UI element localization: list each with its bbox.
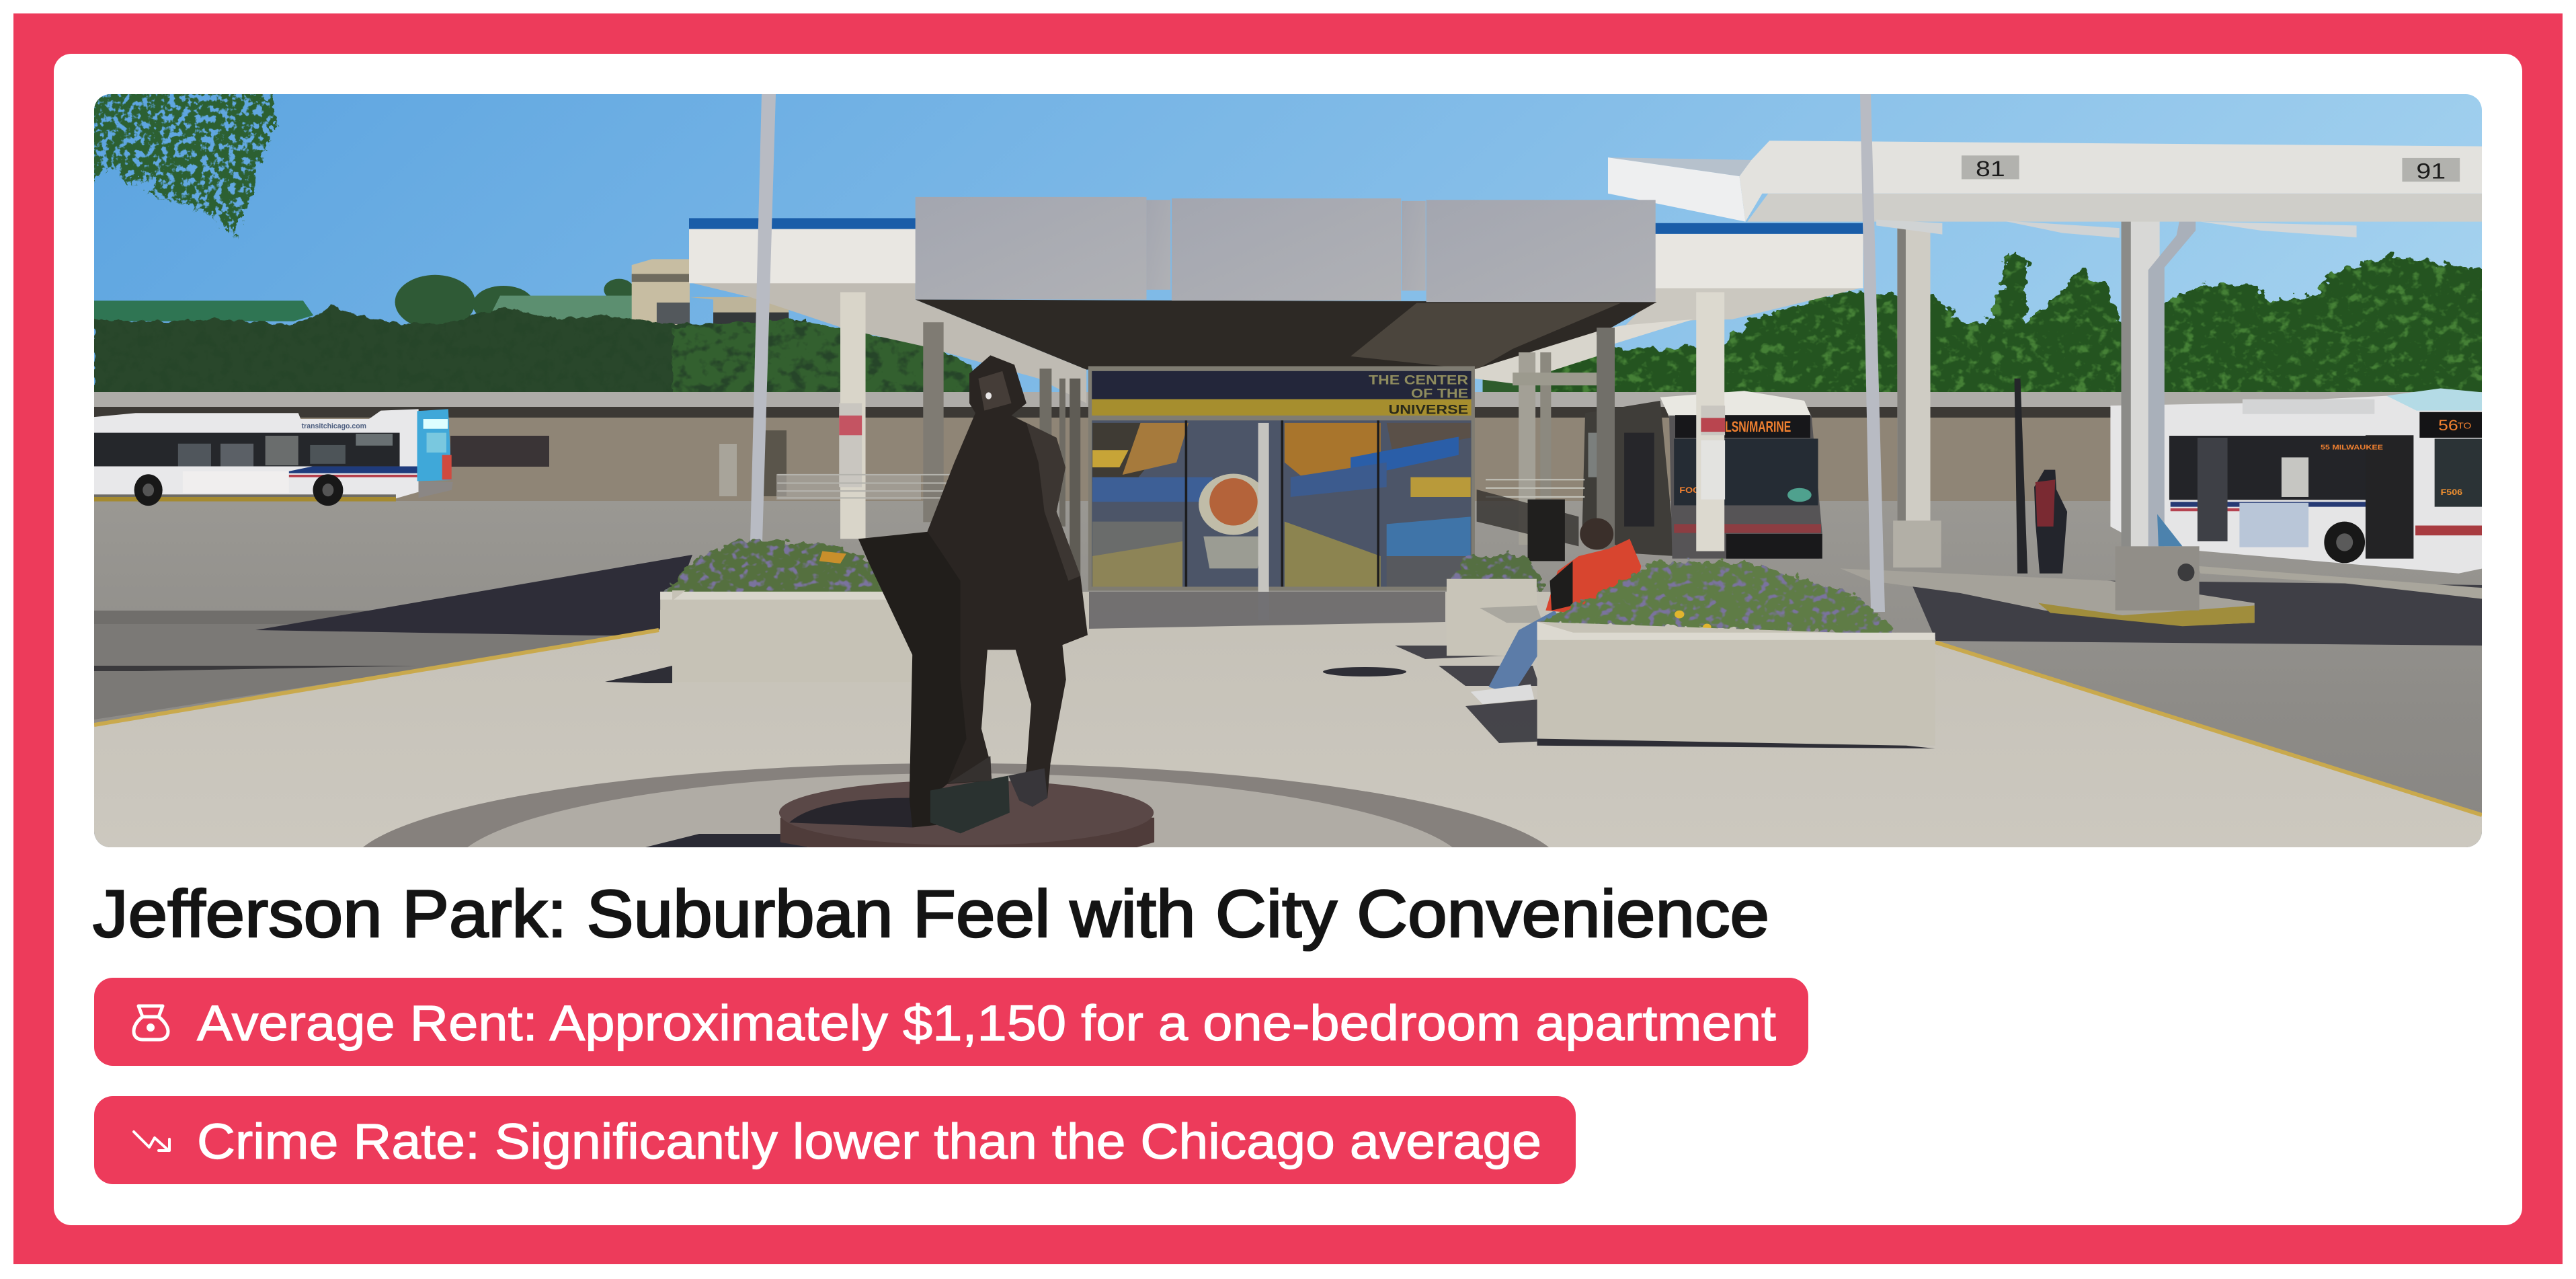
station canopy <box>689 197 1657 620</box>
bay canopy: 91 <box>2416 159 2446 184</box>
mural: The Center of the Universe: UNIVERSE <box>1388 403 1468 417</box>
sidewalk <box>94 592 2482 847</box>
right small planter <box>1447 553 1543 656</box>
rent text: Average Rent: Approximately $1,150 for a one-bedroom apartment <box>197 995 1776 1051</box>
photo: Jefferson Park transit center <box>93 94 2482 1184</box>
center bus and right fascia: FOO <box>1679 486 1700 495</box>
bay canopy <box>1608 141 2519 238</box>
statue of Jefferson on pedestal <box>779 355 1154 850</box>
right bus: TO <box>2458 421 2472 430</box>
pedestal <box>779 780 1154 850</box>
left planter left corner <box>660 590 686 681</box>
left bus: transitchicago.com <box>302 422 366 430</box>
big column with pipe <box>2116 206 2200 611</box>
mural: The Center of the Universe <box>1088 366 1475 590</box>
right road shadow <box>1909 578 2482 646</box>
right bus: 56 <box>2438 418 2458 434</box>
white lower soffit <box>1534 319 1693 369</box>
center bus and right fascia <box>1534 223 1864 559</box>
pavement <box>94 501 2482 847</box>
center pole <box>1258 423 1269 620</box>
book box <box>930 776 1010 833</box>
mural: The Center of the Universe: OF THE <box>1411 386 1468 401</box>
pill: crime rate <box>94 1096 1576 1184</box>
right background trees <box>1546 250 2519 398</box>
right bus: 55 MILWAUKEE <box>2321 444 2383 451</box>
center background trees <box>672 319 1597 398</box>
icon: money bag <box>134 1006 168 1040</box>
crime text: Crime Rate: Significantly lower than the Chicago average <box>197 1114 1541 1169</box>
sky <box>94 94 2482 847</box>
sign post <box>2015 379 2027 574</box>
pill: average rent <box>94 978 1808 1066</box>
mural: The Center of the Universe: THE CENTER <box>1369 373 1468 387</box>
white fascia <box>689 228 917 283</box>
seated person <box>1471 518 1641 704</box>
title: Jefferson Park: Suburban Feel with City Convenience <box>93 876 1769 951</box>
right soffit <box>1624 287 1864 327</box>
circular plaza <box>348 763 1564 978</box>
canopy shadows on sidewalk <box>1089 592 1586 743</box>
figure <box>928 355 1088 807</box>
white column with signs <box>1696 292 1725 551</box>
white fascia right <box>1648 234 1863 288</box>
right planter with flowers <box>1537 561 1935 748</box>
canopy column <box>1893 228 1941 568</box>
icon: trending down <box>134 1132 169 1151</box>
person waiting <box>2034 470 2067 574</box>
lectern <box>858 531 972 828</box>
long shelter roof and wall <box>94 392 2482 502</box>
left planter with lavender <box>660 539 912 682</box>
right bus: F506 <box>2441 488 2462 497</box>
blue stripe <box>689 218 917 229</box>
poles <box>750 94 1885 612</box>
left road darker band and shadows <box>94 555 699 720</box>
yellow curb lines <box>94 630 2482 815</box>
left bus <box>94 409 453 506</box>
right bay: bus, island, columns, canopy <box>1608 141 2519 626</box>
bay canopy: 81 <box>1976 156 2005 181</box>
grey panels <box>916 197 1656 302</box>
columns <box>839 292 1615 596</box>
left background: tree, roofs, building, hedge <box>86 87 807 396</box>
island <box>1841 568 2255 625</box>
center bus and right fascia: LSN/MARINE <box>1725 419 1791 436</box>
railing <box>777 475 1584 498</box>
blue stripe right <box>1648 223 1863 234</box>
right bus <box>2110 389 2519 574</box>
